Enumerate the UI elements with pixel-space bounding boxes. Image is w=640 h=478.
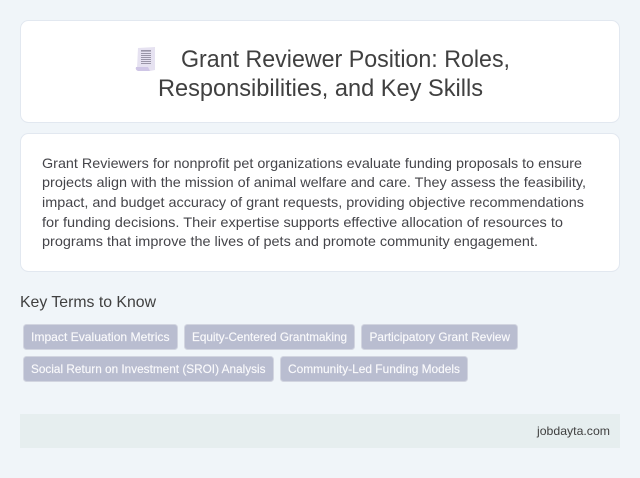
- text block: description: for funding decisions. Their expertise supports effective allocation of resources to: [42, 214, 563, 230]
- title: [158, 46, 510, 102]
- text block: description: impact, and budget accuracy of grant requests, providing objective recommendations: [42, 194, 584, 210]
- heading: key terms: Key Terms to Know: [20, 294, 156, 311]
- text block: description: [42, 155, 586, 249]
- chip: SROI analysis: Social Return on Investment (SROI) Analysis: [31, 362, 266, 376]
- chip: community-led funding models: [280, 356, 468, 382]
- chip: impact evaluation metrics: Impact Evaluation Metrics: [31, 330, 170, 344]
- title: Grant Reviewer Position: Roles,: [181, 46, 510, 73]
- text block: description: programs that improve the lives of pets and promote community engagement.: [42, 233, 538, 249]
- text block: description: projects align with the mission of animal welfare and care. They assess the feasibility,: [42, 174, 586, 190]
- panel: key term chips: [24, 324, 518, 382]
- chip: participatory grant review: [362, 324, 518, 350]
- text block: description: Grant Reviewers for nonprofit pet organizations evaluate funding proposals to ensure: [42, 155, 582, 171]
- panel: description: [20, 134, 620, 272]
- footer: site name: jobdayta.com: [536, 424, 610, 438]
- footer bar: [20, 414, 620, 448]
- title: Responsibilities, and Key Skills: [158, 75, 483, 102]
- icon: paper scroll: [136, 47, 155, 71]
- chip: participatory grant review: Participatory Grant Review: [370, 330, 510, 344]
- chip: equity-centered grantmaking: Equity-Centered Grantmaking: [192, 330, 347, 344]
- chip: equity-centered grantmaking: [184, 324, 354, 350]
- chip: community-led funding models: Community-Led Funding Models: [288, 362, 460, 376]
- chip: impact evaluation metrics: [24, 324, 178, 350]
- panel: title card: [20, 20, 620, 122]
- chip: SROI analysis: [24, 356, 274, 382]
